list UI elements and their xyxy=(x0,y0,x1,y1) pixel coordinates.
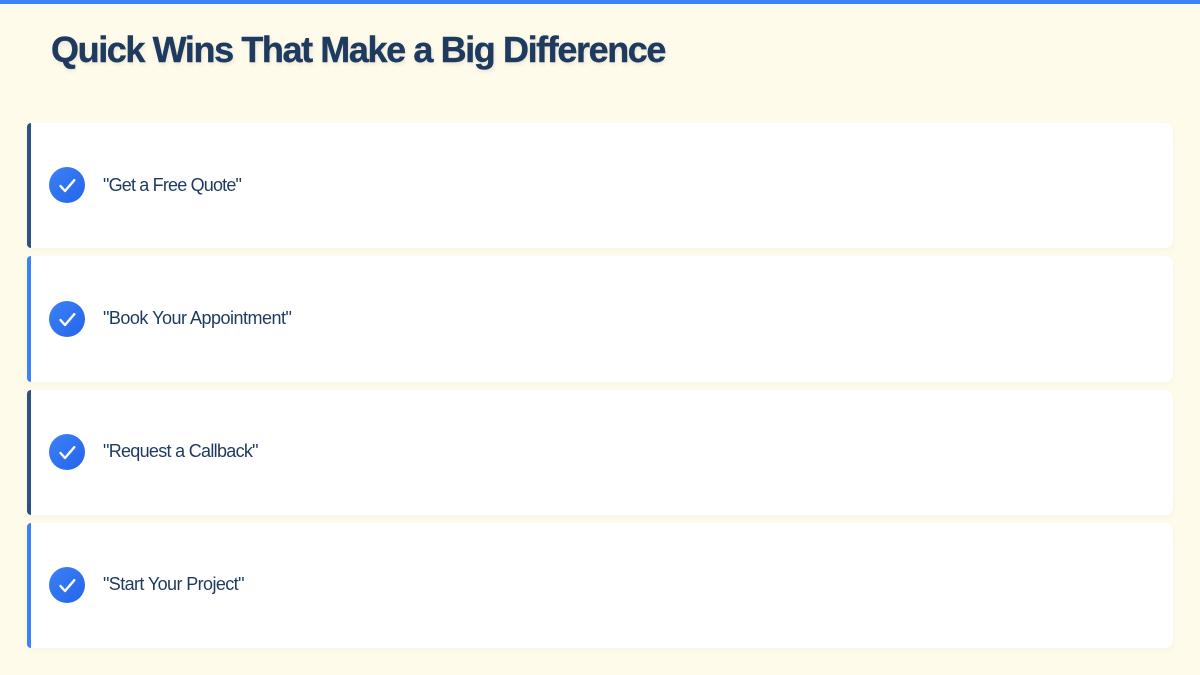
icon: check mark xyxy=(49,301,85,337)
text: Book Your Appointment: "Book Your Appointment" xyxy=(103,308,291,328)
panel: Get a Free Quote xyxy=(27,123,1173,248)
title: Quick Wins That Make a Big Difference xyxy=(51,29,665,70)
text: Request a Callback: "Request a Callback" xyxy=(103,441,258,461)
panel: Book Your Appointment xyxy=(27,256,1173,382)
top accent bar xyxy=(0,0,1200,4)
panel: Request a Callback xyxy=(27,390,1173,515)
icon: check mark xyxy=(49,434,85,470)
icon: check mark xyxy=(49,567,85,603)
text: Get a Free Quote: "Get a Free Quote" xyxy=(103,175,241,195)
panel: Start Your Project xyxy=(27,523,1173,648)
icon: check mark xyxy=(49,167,85,203)
text: Start Your Project: "Start Your Project" xyxy=(103,574,244,594)
